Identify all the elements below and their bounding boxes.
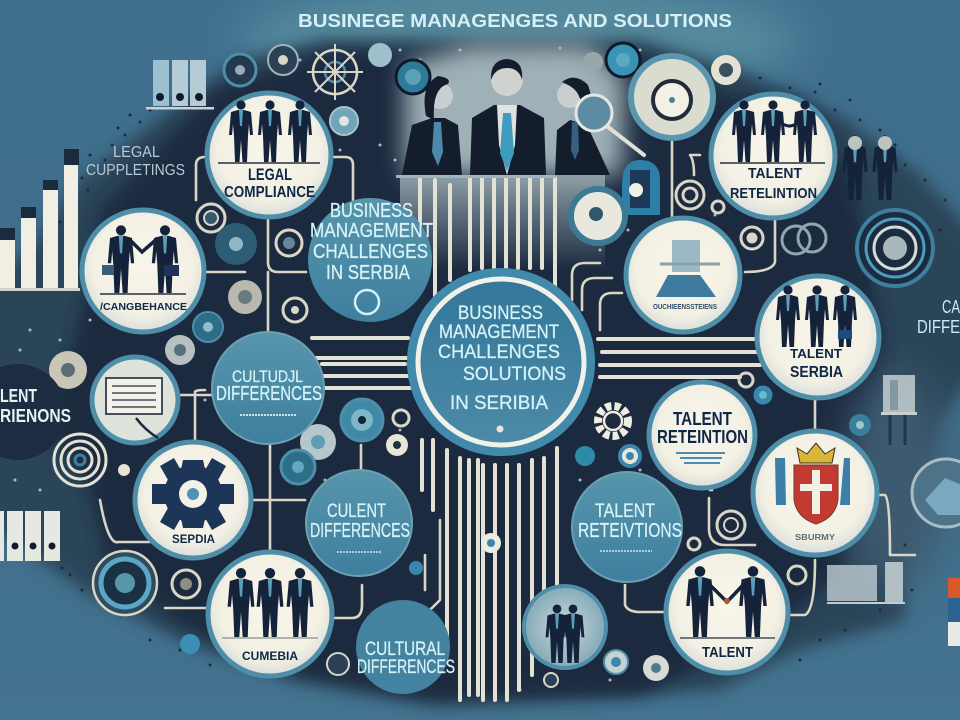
- light panel behind executives: [405, 45, 625, 175]
- horizontal bus lines: [312, 338, 760, 388]
- panel: gear: SEPDIA: [172, 532, 215, 546]
- panel: cultural differences bottom: CULTURAL: [365, 639, 445, 660]
- grey haze right side: [845, 370, 945, 590]
- panel: cultural differences bottom: [356, 600, 455, 694]
- executives: [396, 59, 644, 178]
- panel: client differences: [306, 470, 412, 576]
- panel: left dark circle: [0, 364, 71, 460]
- icon: spiral: [54, 434, 106, 486]
- faded heading: legal cupplings: [86, 144, 185, 179]
- panel: three executives bottom: CUMEBIA: [242, 649, 298, 663]
- icon: teal knots top: [583, 43, 741, 85]
- panel: central hub: CHALLENGES: [438, 342, 560, 363]
- panel: two figures teal: [524, 586, 606, 668]
- vertical bus lines: [420, 178, 557, 700]
- panel: talent handshake: [666, 551, 788, 673]
- panel: central hub: SOLUTIONS: [463, 364, 566, 385]
- panel: document circle: [92, 357, 178, 443]
- panel: client differences: CULENT: [327, 501, 386, 522]
- speckles: [45, 78, 945, 665]
- panel: talent serbia: SERBIA: [790, 364, 843, 381]
- panel: cultural differences bottom: DIFFERENCES: [357, 657, 455, 678]
- flag: [948, 578, 960, 646]
- icon: lens circle: [631, 56, 713, 138]
- panel: central hub: IN SERIBIA: [450, 393, 548, 414]
- icon: target right: [857, 210, 933, 286]
- panel: central hub: [407, 268, 595, 456]
- panel: central hub: MANAGEMENT: [439, 322, 559, 343]
- bar chart: [0, 149, 80, 291]
- panel: talent retention top: TALENT: [748, 165, 802, 182]
- panel: challenges teal circle: [308, 198, 433, 322]
- icon: glass circle right edge: [912, 459, 960, 527]
- panel: talent serbia: TALENT: [790, 346, 842, 361]
- icon: target lower left: [93, 551, 157, 615]
- panel: gear: [135, 442, 251, 558]
- faded heading: cultural differences right: [917, 297, 960, 337]
- faded heading: legal cupplings: CUPPLETINGS: [86, 162, 185, 179]
- panel: cultural differences: CULTUDJL: [232, 367, 303, 386]
- decorative medallions: [49, 43, 871, 687]
- panel: talent retention cream: [649, 382, 755, 488]
- icon: gear right of main: [598, 406, 628, 436]
- panel: handshake: [82, 210, 204, 332]
- panel: client differences: DIFFERENCES: [310, 520, 410, 542]
- panel: legal compliance: [207, 93, 331, 217]
- panel: talent handshake: TALENT: [702, 644, 753, 661]
- panel: challenges teal circle: MANAGEMENT: [310, 220, 433, 242]
- panel: serbian crest: [753, 431, 877, 555]
- faded heading: legal cupplings: LEGAL: [113, 144, 160, 161]
- panel: cultural differences: DIFFERENCES: [216, 383, 322, 405]
- icon: equipment faded: [827, 562, 905, 604]
- panel: central hub: BUSINESS: [458, 303, 543, 324]
- binders bottom: [0, 511, 60, 561]
- panel: legal compliance: LEGAL: [248, 165, 292, 184]
- panel: handshake: /CANGBEHANCE: [100, 302, 187, 313]
- panel: book: OUCHIEENSSTEIENS: [653, 304, 717, 311]
- light speckles: [15, 48, 870, 690]
- panel: book: [626, 218, 740, 332]
- panel: serbian crest: SBURMY: [795, 533, 836, 542]
- panel: challenges teal circle: BUSINESS: [330, 200, 413, 222]
- binders top: [146, 60, 214, 110]
- panel: left dark circle: RIENONS: [0, 406, 71, 426]
- panel: talent serbia: [757, 276, 879, 398]
- panel: talent retention top: [711, 94, 835, 218]
- panel: left dark circle: LENT: [0, 386, 37, 406]
- connectors: [92, 140, 915, 635]
- panel: talent retention cream: TALENT: [673, 409, 732, 429]
- icon: magnifying glass: [576, 95, 644, 155]
- icon: blue gear badge: [622, 160, 660, 215]
- dark network core: [40, 50, 885, 700]
- panel: three executives bottom: [208, 552, 332, 676]
- panel: challenges teal circle: IN SERBIA: [326, 262, 411, 284]
- panel: legal compliance: COMPLIANCE: [224, 184, 315, 201]
- icon: distant executives: [842, 135, 898, 200]
- panel: talent retention cream: RETEINTION: [657, 427, 748, 447]
- icon: small rings right: [676, 181, 826, 254]
- panel: talent retentions: TALENT: [595, 501, 655, 522]
- icon: bus junction ring: [481, 533, 501, 553]
- grey haze below executives: [400, 175, 605, 270]
- icon: building faded: [881, 375, 917, 445]
- panel: talent retention top: RETELINTION: [730, 185, 817, 202]
- panel: cultural differences: [212, 332, 324, 444]
- top glow: [240, 0, 800, 100]
- panel: challenges teal circle: CHALLENGES: [313, 241, 428, 263]
- panel: talent retentions: [572, 472, 682, 582]
- panel: talent retentions: RETEIVTIONS: [578, 520, 682, 542]
- icon: medallion beside executives: [571, 189, 625, 243]
- title: BUSINEGE MANAGENGES AND SOLUTIONS: [298, 11, 732, 31]
